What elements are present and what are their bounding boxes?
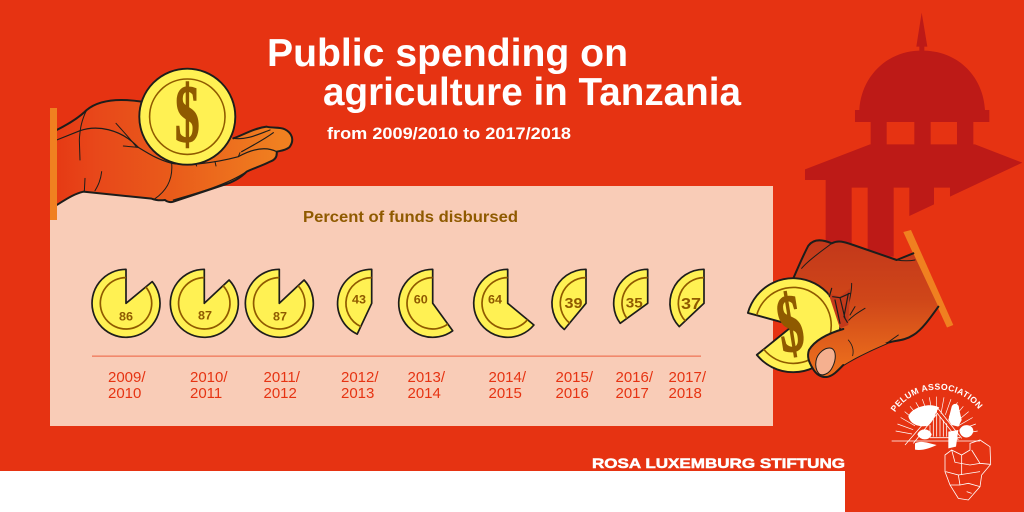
year labels: 2010/ — [190, 369, 228, 386]
year labels: 2015 — [488, 385, 522, 402]
year labels: 2012 — [264, 385, 297, 402]
pie: 2010/2011 87 percent — [170, 269, 238, 337]
pie: 2010/2011 87 percent: 87 — [198, 310, 212, 322]
year labels: 2013/ — [408, 369, 446, 386]
logo: PELUM Association — [890, 384, 992, 500]
icon: right hand — [793, 240, 938, 365]
pie: 2013/2014 60 percent: 60 — [414, 294, 428, 306]
pie: 2012/2013 43 percent: 43 — [352, 294, 366, 306]
year labels: 2017 — [616, 385, 649, 402]
icon: dollar coin — [139, 68, 235, 165]
year labels: 2016/ — [616, 369, 654, 386]
icon: bitten dollar coin: $ — [771, 277, 809, 370]
year labels: 2010 — [108, 385, 141, 402]
logo arc text: PELUM ASSOCIATION — [890, 384, 983, 412]
pie: 2012/2013 43 percent — [338, 269, 372, 334]
title: agriculture in Tanzania — [323, 71, 741, 114]
figure — [948, 404, 962, 448]
title: Public spending on — [267, 32, 628, 75]
title — [267, 32, 741, 114]
year labels: 2009/ — [108, 369, 146, 386]
pie: 2014/2015 64 percent — [474, 269, 534, 337]
year labels: 2014/ — [488, 369, 527, 386]
year labels: 2011 — [190, 385, 222, 402]
left open hand holding coin — [50, 68, 292, 220]
subtitle: from 2009/2010 to 2017/2018 — [327, 124, 571, 143]
icon: left hand — [57, 100, 292, 205]
pie: 2017/2018 37 percent — [670, 269, 704, 327]
accent bar — [50, 108, 57, 220]
right hand gripping bitten coin — [748, 230, 953, 377]
year labels: 2013 — [341, 385, 374, 402]
pie: 2009/2010 86 percent: 86 — [119, 311, 133, 323]
icon: thumb and fingers — [808, 288, 887, 377]
year labels: 2012/ — [341, 369, 379, 386]
timeline axis — [92, 356, 701, 357]
white footer band — [0, 471, 845, 512]
icon: dollar coin: $ — [175, 68, 200, 159]
icon: government building silhouette — [805, 13, 1022, 257]
year labels: 2011/ — [264, 369, 301, 386]
pie: 2015/2016 39 percent — [552, 269, 586, 330]
chart heading: Percent of funds disbursed — [303, 209, 518, 226]
year labels: 2016 — [556, 385, 589, 402]
year labels: 2015/ — [556, 369, 594, 386]
pie: 2013/2014 60 percent — [399, 269, 453, 337]
map of southern Africa — [945, 440, 991, 500]
pie chart row — [92, 269, 704, 337]
pie: 2016/2017 35 percent: 35 — [626, 294, 643, 310]
pie: 2017/2018 37 percent: 37 — [681, 296, 701, 313]
pie: 2016/2017 35 percent — [614, 269, 648, 323]
pie: 2009/2010 86 percent — [92, 269, 160, 337]
year labels — [108, 369, 707, 402]
pie: 2015/2016 39 percent: 39 — [564, 295, 582, 312]
panel: percent of funds disbursed — [50, 186, 773, 426]
year labels: 2018 — [668, 385, 702, 402]
pie: 2011/2012 87 percent — [245, 269, 313, 337]
year labels: 2014 — [408, 385, 441, 402]
icon: bitten dollar coin — [748, 277, 840, 372]
brand: Rosa Luxemburg Stiftung: ROSA LUXEMBURG STIFTUNG — [592, 455, 845, 471]
sun rays — [892, 397, 980, 441]
thatched hut frame — [905, 408, 962, 445]
accent bar — [903, 230, 953, 328]
pie: 2011/2012 87 percent: 87 — [273, 311, 287, 323]
year labels: 2017/ — [668, 369, 707, 386]
pie: 2014/2015 64 percent: 64 — [488, 294, 503, 306]
tree canopies — [908, 405, 973, 450]
